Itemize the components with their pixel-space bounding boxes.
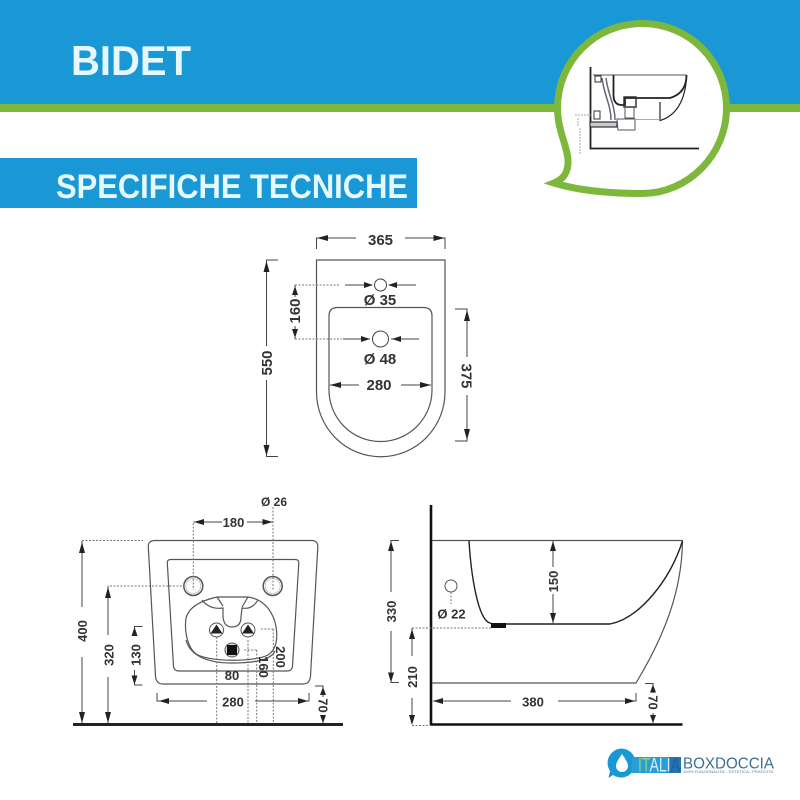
floor line xyxy=(73,723,343,726)
wall plate outer outline xyxy=(148,540,318,684)
side hole Ø22: Ø 22 xyxy=(437,606,466,622)
dimension Ø48 xyxy=(343,336,419,368)
dimension Ø48: Ø 48 xyxy=(364,351,396,368)
dimension 130 xyxy=(128,626,144,685)
speech bubble with bidet cross-section xyxy=(554,24,726,194)
dimension 375: 375 xyxy=(458,363,474,389)
dimension 380: 380 xyxy=(522,694,544,710)
dimension 150: 150 xyxy=(546,571,561,592)
inner outline xyxy=(167,560,299,671)
dashed guides xyxy=(82,507,273,724)
dimension 70: 70 xyxy=(646,695,660,710)
basin profile xyxy=(469,540,682,624)
drain fittings xyxy=(210,623,255,657)
dimension 380 xyxy=(433,693,636,710)
dimension 180: 180 xyxy=(223,515,244,530)
dimension 70 xyxy=(645,684,660,723)
dimension 375 xyxy=(455,309,474,441)
dimension 160: 160 xyxy=(287,298,304,324)
dimension 320 xyxy=(102,586,116,723)
logo: Italia Boxdoccia xyxy=(608,748,774,778)
drain block xyxy=(491,623,506,628)
icon: water drop badge xyxy=(608,748,636,778)
dimension 210: 210 xyxy=(405,666,420,688)
body outline xyxy=(432,540,682,683)
side hole Ø22 xyxy=(437,580,466,622)
dimension 80: 80 xyxy=(225,668,239,683)
dimension 330: 330 xyxy=(384,601,399,622)
dimension 70 xyxy=(315,686,330,723)
basin outline xyxy=(329,308,432,441)
dimension 200: 200 xyxy=(273,646,288,668)
logo: Italia Boxdoccia: ITALIA xyxy=(638,756,680,776)
dimension 400 xyxy=(75,541,90,723)
dimension 280: 280 xyxy=(366,377,392,394)
dimension 280 xyxy=(157,693,309,710)
dimension 160: 160 xyxy=(256,656,271,678)
dimension 210 xyxy=(405,628,491,726)
dimension 180 xyxy=(194,515,272,530)
bidet outer outline xyxy=(316,260,445,457)
dimension 550: 550 xyxy=(259,350,276,376)
icon: bidet cross-section xyxy=(575,67,699,155)
section banner: specifiche tecniche: SPECIFICHE TECNICHE xyxy=(56,168,408,206)
front view drawing xyxy=(73,495,343,726)
title: BIDET xyxy=(71,37,191,84)
top view drawing xyxy=(259,232,474,457)
dimension Ø35 xyxy=(345,282,416,309)
dimension 320: 320 xyxy=(102,644,116,666)
dimension 280: 280 xyxy=(222,694,244,710)
tap holes xyxy=(372,279,388,347)
dimension 150 xyxy=(546,541,561,623)
dimension 365 xyxy=(316,232,445,249)
dimension 130: 130 xyxy=(128,644,144,666)
dimension Ø35: Ø 35 xyxy=(364,292,396,309)
dimension 330 xyxy=(384,540,399,682)
side view drawing xyxy=(384,505,682,726)
logo: Italia Boxdoccia: BOXDOCCIA xyxy=(683,756,774,772)
dimension 550 xyxy=(259,260,278,456)
dimension 280 xyxy=(330,377,431,394)
dimension 400: 400 xyxy=(75,620,90,642)
dimension 70: 70 xyxy=(316,698,330,713)
logo: Italia Boxdoccia: 100% FUNZIONALITA' - ESTETICA - PRATICITA' xyxy=(683,770,774,774)
wall and floor xyxy=(431,505,682,724)
dimension 160 xyxy=(287,285,342,339)
dimension Ø26: Ø 26 xyxy=(261,495,287,509)
header band xyxy=(0,0,800,112)
section banner: specifiche tecniche xyxy=(0,158,417,208)
connection holes xyxy=(184,576,282,596)
basin opening xyxy=(186,597,277,663)
dimension 365: 365 xyxy=(368,232,393,249)
